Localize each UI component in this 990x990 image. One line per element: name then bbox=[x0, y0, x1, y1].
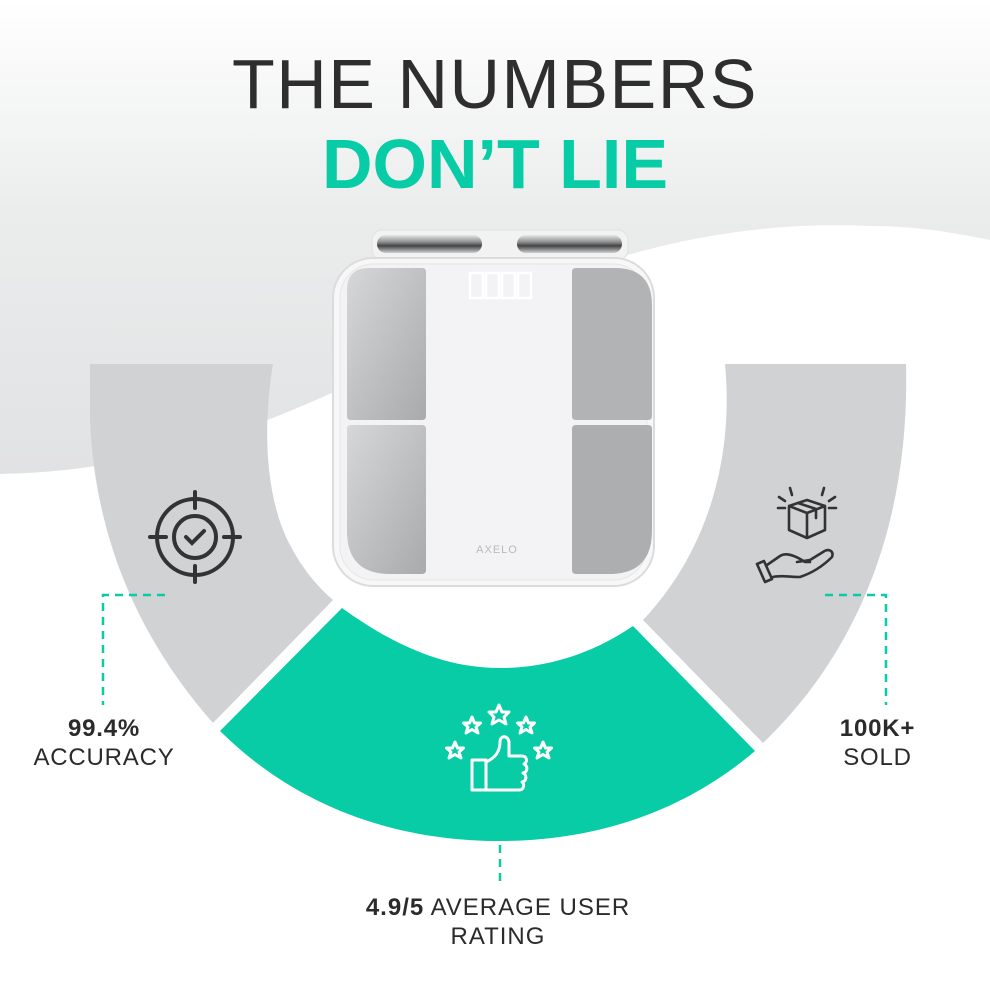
label: sold: 100K+ bbox=[840, 715, 915, 742]
title: THE NUMBERS bbox=[232, 45, 758, 123]
icon: thumbs up with stars bbox=[446, 705, 552, 790]
label: accuracy: 99.4% bbox=[68, 715, 140, 742]
label: accuracy: ACCURACY bbox=[33, 744, 175, 771]
subtitle: DON’T LIE bbox=[322, 125, 668, 203]
icon: target bbox=[150, 492, 240, 582]
segment: right sold bbox=[643, 364, 906, 743]
scale product bbox=[333, 230, 654, 586]
label: sold bbox=[840, 715, 915, 771]
label: accuracy bbox=[33, 715, 175, 771]
label: rating bbox=[366, 894, 630, 950]
label: sold: SOLD bbox=[843, 744, 912, 771]
label: rating: RATING bbox=[451, 923, 545, 950]
scale product: AXELO bbox=[476, 544, 518, 556]
segment: left accuracy bbox=[90, 364, 333, 723]
label: rating: 4.9/5 AVERAGE USER bbox=[366, 894, 630, 921]
segment: center rating bbox=[220, 608, 755, 841]
icon: box in hand bbox=[757, 488, 836, 582]
